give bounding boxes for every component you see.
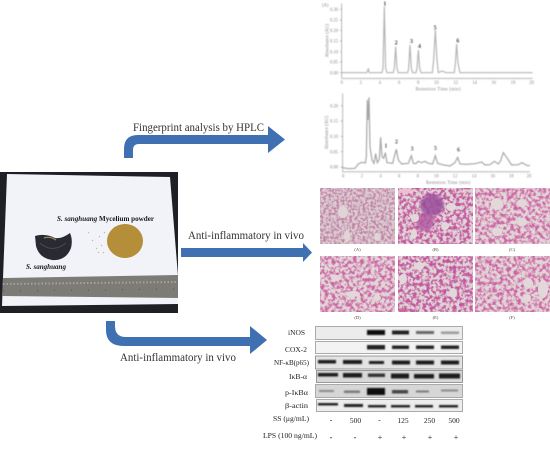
blot labels xyxy=(263,328,318,440)
peak labels: 5 xyxy=(434,25,437,31)
axis labels: 0.15 xyxy=(330,120,339,125)
axis labels: 10 xyxy=(434,175,439,180)
SS dose values: 500 xyxy=(448,416,460,425)
axis labels: 2 xyxy=(361,175,364,180)
LPS plus and minus row: + xyxy=(402,433,407,442)
label: fingerprint analysis: Fingerprint analysis by HPLC xyxy=(133,122,264,134)
axis labels: 0.25 xyxy=(330,19,339,24)
blot row: COX-2 xyxy=(316,342,462,354)
SS dose values: - xyxy=(330,415,333,424)
blot labels: iNOS xyxy=(288,328,305,337)
label: anti-inflammatory western blot: Anti-inflammatory in vivo xyxy=(120,352,236,364)
axis labels: 0.30 xyxy=(330,8,339,13)
panel: lung histology B: (B) xyxy=(432,247,439,252)
arrow: to western blot xyxy=(106,321,267,354)
label: mycelium powder: S. sanghuang Mycelium powder xyxy=(57,214,155,223)
panel: lung histology F: (F) xyxy=(509,315,515,320)
blot labels: NF-κB(p65) xyxy=(274,358,309,367)
axis labels: 16 xyxy=(491,81,497,86)
panel: lung histology B xyxy=(398,188,473,252)
axis labels: 0.15 xyxy=(330,40,339,45)
axis labels: Absorbance (AU) xyxy=(325,24,330,57)
axis labels: 0.05 xyxy=(330,150,339,155)
axis labels: 16 xyxy=(490,175,496,180)
axis labels: 20 xyxy=(529,81,535,86)
ruler xyxy=(2,275,178,298)
axis labels: 14 xyxy=(472,81,478,86)
blot labels: LPS (100 ng/mL) xyxy=(263,431,318,440)
label: S. sanghuang: S. sanghuang xyxy=(26,262,66,271)
axis labels: 0.20 xyxy=(330,29,339,34)
mushroom specimen xyxy=(35,233,72,260)
blot labels: IκB-α xyxy=(289,372,307,381)
panel: lung histology D xyxy=(320,256,395,320)
SS dose values: 125 xyxy=(397,416,409,425)
axis labels: 0.00 xyxy=(330,166,339,171)
panel: lung histology A xyxy=(320,188,395,252)
axis labels: 0.10 xyxy=(330,50,339,55)
axis labels: 0 xyxy=(341,81,344,86)
axis labels: 18 xyxy=(511,81,516,86)
axis labels: 8 xyxy=(417,175,420,180)
chart: HPLC standard chromatogram A xyxy=(322,1,535,93)
peak labels: 1 xyxy=(384,144,387,150)
axis labels: 6 xyxy=(398,175,401,180)
SS dose values xyxy=(330,415,460,425)
blot labels: p-IκBα xyxy=(285,388,308,397)
axis labels: 0.20 xyxy=(330,104,339,109)
blot labels: COX-2 xyxy=(285,345,307,354)
peak labels: 5 xyxy=(434,146,437,152)
axis labels: 4 xyxy=(379,175,382,180)
LPS plus and minus row xyxy=(330,433,459,442)
axis labels: 20 xyxy=(527,175,532,180)
axis labels: (A) xyxy=(322,4,329,9)
axis labels: Retention Time (min) xyxy=(426,181,471,186)
blot row: beta-actin xyxy=(316,400,462,412)
arrow: to HPLC fingerprint xyxy=(124,126,285,158)
SS dose values: - xyxy=(378,415,381,424)
axis labels: 0.00 xyxy=(330,71,339,76)
axis labels: Retention Time (min) xyxy=(416,88,461,93)
blot row: p-IkB-alpha xyxy=(316,384,462,398)
panel: lung histology E: (E) xyxy=(433,315,439,320)
axis labels: 2 xyxy=(360,81,363,86)
peak labels: 4 xyxy=(418,44,421,50)
LPS plus and minus row: + xyxy=(378,433,383,442)
axis labels: 18 xyxy=(509,175,514,180)
axis labels: 8 xyxy=(417,81,420,86)
axis labels: 0.10 xyxy=(330,135,339,140)
axis labels: 0.05 xyxy=(330,61,339,66)
peak labels: 2 xyxy=(395,41,398,47)
axis labels: 12 xyxy=(453,175,458,180)
peak labels: 2 xyxy=(395,140,398,146)
label: anti-inflammatory histology: Anti-inflammatory in vivo xyxy=(188,230,304,242)
arrow: to lung histology xyxy=(181,243,312,262)
blot row: NF-kB p65 xyxy=(316,356,462,369)
chart: HPLC sample chromatogram B xyxy=(325,93,532,186)
peak labels: 3 xyxy=(410,39,413,45)
western blot xyxy=(263,326,462,442)
axis labels: 6 xyxy=(398,81,401,86)
axis labels: 14 xyxy=(472,175,477,180)
mycelium powder pile xyxy=(88,224,143,258)
peak labels: 6 xyxy=(457,148,460,154)
LPS plus and minus row: + xyxy=(428,433,433,442)
panel: lung histology C: (C) xyxy=(509,247,516,252)
panel: lung histology C xyxy=(475,188,550,252)
panel: lung histology E xyxy=(398,256,473,320)
panel: lung histology D: (D) xyxy=(354,315,361,320)
peak labels: 6 xyxy=(456,39,459,45)
axis labels: Absorbance (AU) xyxy=(325,116,330,149)
panel: lung histology A: (A) xyxy=(354,247,361,252)
panel: lung histology F xyxy=(475,256,550,320)
peak labels: 1 xyxy=(383,1,386,7)
blot labels: β-actin xyxy=(285,401,308,410)
LPS plus and minus row: - xyxy=(330,433,333,442)
peak labels: 3 xyxy=(411,146,414,152)
SS dose values: 500 xyxy=(350,416,361,425)
axis labels: 0 xyxy=(342,175,345,180)
axis labels: 10 xyxy=(434,81,439,86)
blot row: iNOS xyxy=(316,326,462,340)
peak labels xyxy=(383,1,459,50)
photo: S. sanghuang specimen and mycelium powder xyxy=(0,172,178,313)
peak labels xyxy=(384,140,460,154)
axis labels: 4 xyxy=(379,81,382,86)
LPS plus and minus row: - xyxy=(354,433,357,442)
blot labels: SS (μg/mL) xyxy=(273,414,310,423)
LPS plus and minus row: + xyxy=(454,433,459,442)
axis labels xyxy=(325,104,532,186)
SS dose values: 250 xyxy=(424,416,435,425)
blot row: IkB-alpha xyxy=(316,370,462,382)
axis labels xyxy=(322,4,535,93)
axis labels: 12 xyxy=(453,81,459,86)
